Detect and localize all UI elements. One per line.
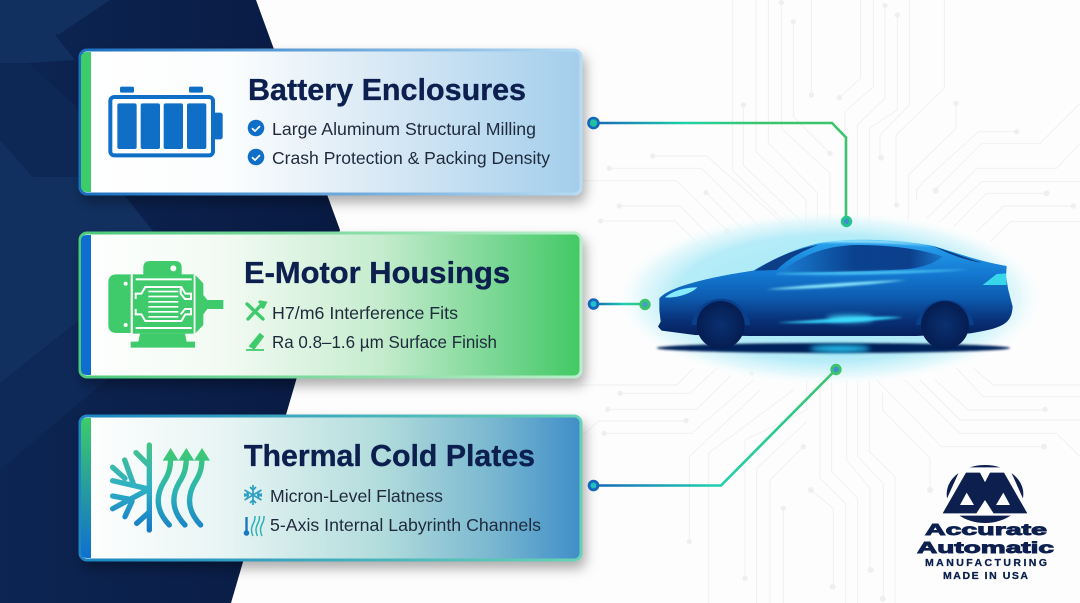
body highlights	[767, 240, 970, 323]
heading: E-Motor Housings	[244, 255, 510, 290]
front wheel	[692, 299, 750, 349]
accent bar	[81, 235, 91, 375]
circuit board line pattern	[580, 0, 1080, 603]
heading: Battery Enclosures	[248, 72, 526, 107]
icon: battery	[110, 87, 223, 155]
logo text: Made in USA: MADE IN USA	[943, 570, 1028, 582]
icon: snowflake and heat arrows	[113, 445, 210, 530]
electric car	[657, 240, 1013, 353]
taillight	[983, 273, 1007, 285]
card panel	[80, 233, 581, 377]
logo wordmark: Accurate: Accurate	[925, 522, 1047, 539]
bullet: internal channels: 5-Axis Internal Labyrinth Channels	[270, 515, 541, 535]
rear wheel	[916, 300, 974, 349]
heading: Thermal Cold Plates	[244, 438, 535, 473]
logo mark	[939, 465, 1031, 523]
windshield	[755, 245, 818, 271]
bullet: crash protection: Crash Protection & Packing Density	[272, 148, 550, 168]
accent bar	[81, 52, 91, 192]
card panel	[80, 50, 581, 194]
logo: Accurate Automatic	[917, 465, 1054, 582]
card: Thermal Cold Plates	[80, 416, 581, 560]
headlight	[665, 287, 697, 297]
card: Battery Enclosures	[80, 50, 581, 194]
logo text: Manufacturing: MANUFACTURING	[925, 557, 1047, 569]
card panel	[80, 416, 581, 560]
logo wordmark: Automatic: Automatic	[917, 540, 1054, 557]
connector: battery to car	[588, 118, 851, 226]
rear glass	[933, 246, 982, 263]
accent bar	[81, 418, 91, 558]
connector: cold plate to car	[589, 365, 840, 490]
side window	[780, 245, 943, 273]
card: E-Motor Housings	[80, 233, 581, 377]
bullet: surface finish: Ra 0.8–1.6 µm Surface Finish	[272, 332, 497, 352]
ground shadow	[657, 343, 1010, 353]
icon: electric motor	[108, 261, 223, 348]
underglow	[810, 345, 870, 352]
bullet: interference fits: H7/m6 Interference Fits	[272, 303, 458, 323]
glow behind car	[614, 210, 1046, 386]
bullet: flatness: Micron-Level Flatness	[270, 486, 443, 506]
connector: motor to car	[589, 300, 649, 309]
car body	[658, 240, 1013, 336]
bullet: aluminum milling: Large Aluminum Structural Milling	[272, 119, 536, 139]
navy diagonal left panel	[0, 0, 340, 603]
